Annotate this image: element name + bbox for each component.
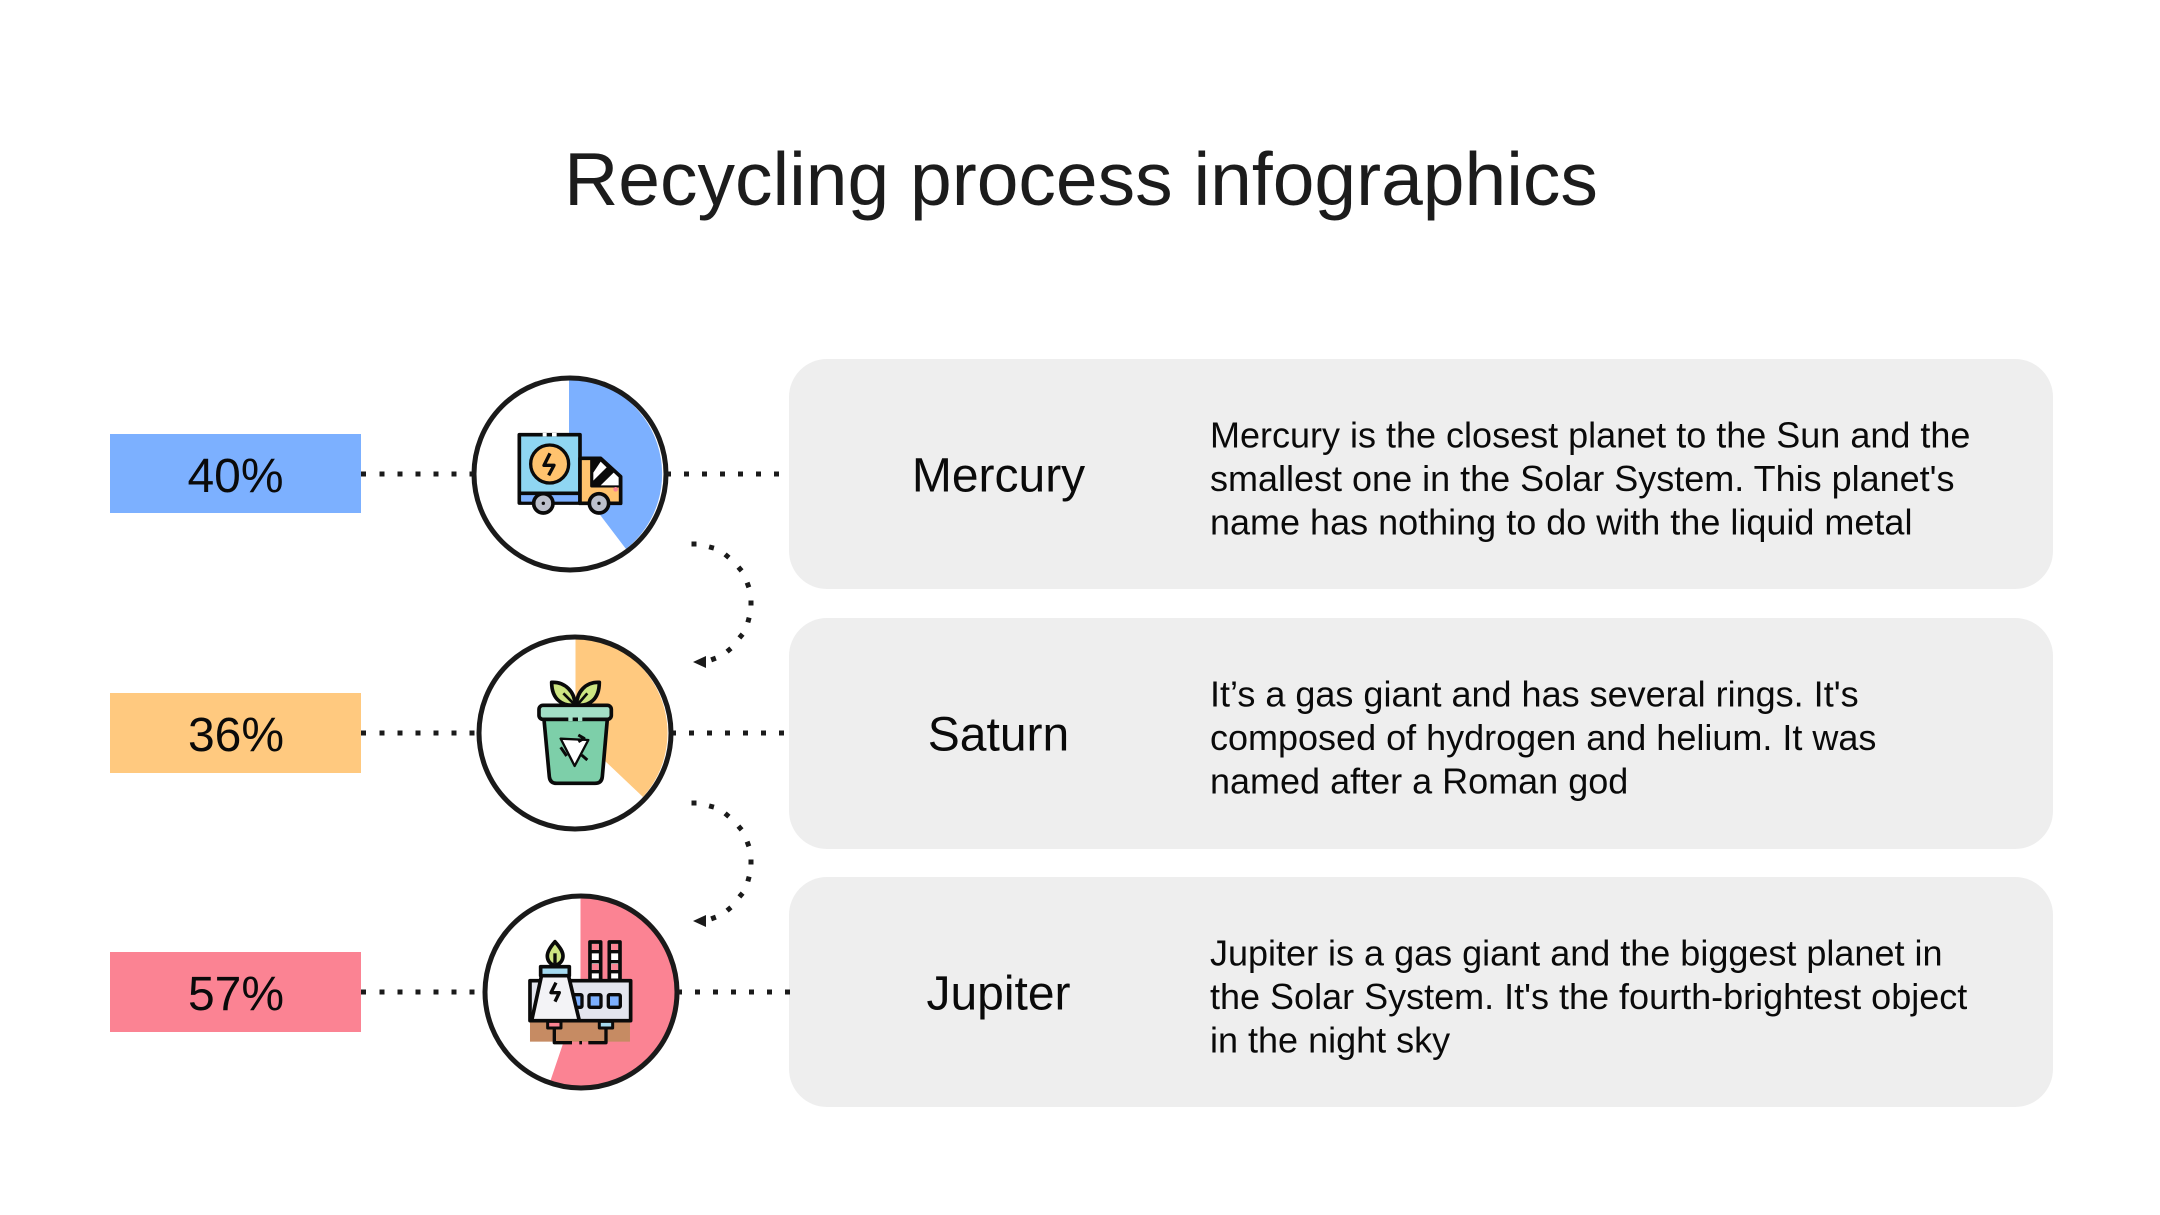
panel: Mercury (789, 359, 2053, 589)
arrow: Mercury to Saturn (692, 542, 754, 668)
title: Recycling process infographics (564, 137, 1598, 221)
icon: electric truck (519, 435, 621, 513)
arrow: Saturn to Jupiter (692, 800, 754, 927)
panel: Saturn (789, 618, 2053, 849)
percentage tag: 57%: 57% (188, 968, 284, 1021)
panel: Mercury: Mercury (912, 450, 1085, 502)
connector dots left and right (361, 472, 779, 476)
percentage tag: 36%: 36% (188, 709, 284, 762)
panel: Jupiter: Jupiter (926, 968, 1071, 1020)
row: Saturn (110, 618, 2053, 849)
percentage tag: 36% (110, 693, 361, 773)
panel: Mercury: smallest one in the Solar System. This planet's (1210, 458, 1955, 499)
panel: Mercury: Mercury is the closest planet to the Sun and the (1210, 414, 1970, 456)
icon: power plant (530, 942, 631, 1043)
panel: Jupiter: the Solar System. It's the fourth-brightest object (1210, 976, 1967, 1017)
percentage tag: 57% (110, 952, 361, 1032)
pie circle: 57% pink (485, 896, 679, 1088)
pie circle: 36% orange (479, 637, 671, 829)
row: Jupiter (110, 877, 2053, 1107)
connector dots left and right (361, 730, 784, 736)
panel: Jupiter: in the night sky (1210, 1020, 1450, 1060)
connector dots left and right (361, 990, 790, 994)
panel: Saturn: composed of hydrogen and helium. It was (1210, 717, 1876, 758)
percentage tag: 40%: 40% (187, 450, 284, 503)
pie circle: 40% blue (474, 378, 666, 570)
panel: Saturn: Saturn (928, 708, 1069, 762)
panel: Mercury: name has nothing to do with the liquid metal (1210, 502, 1912, 542)
row: Mercury (110, 359, 2053, 589)
panel: Jupiter: Jupiter is a gas giant and the biggest planet in (1210, 932, 1942, 974)
panel: Jupiter (789, 877, 2053, 1107)
panel: Saturn: It’s a gas giant and has several rings. It's (1210, 674, 1859, 714)
percentage tag: 40% (110, 434, 361, 513)
icon: recycling plant pot (539, 682, 611, 783)
panel: Saturn: named after a Roman god (1210, 760, 1628, 802)
